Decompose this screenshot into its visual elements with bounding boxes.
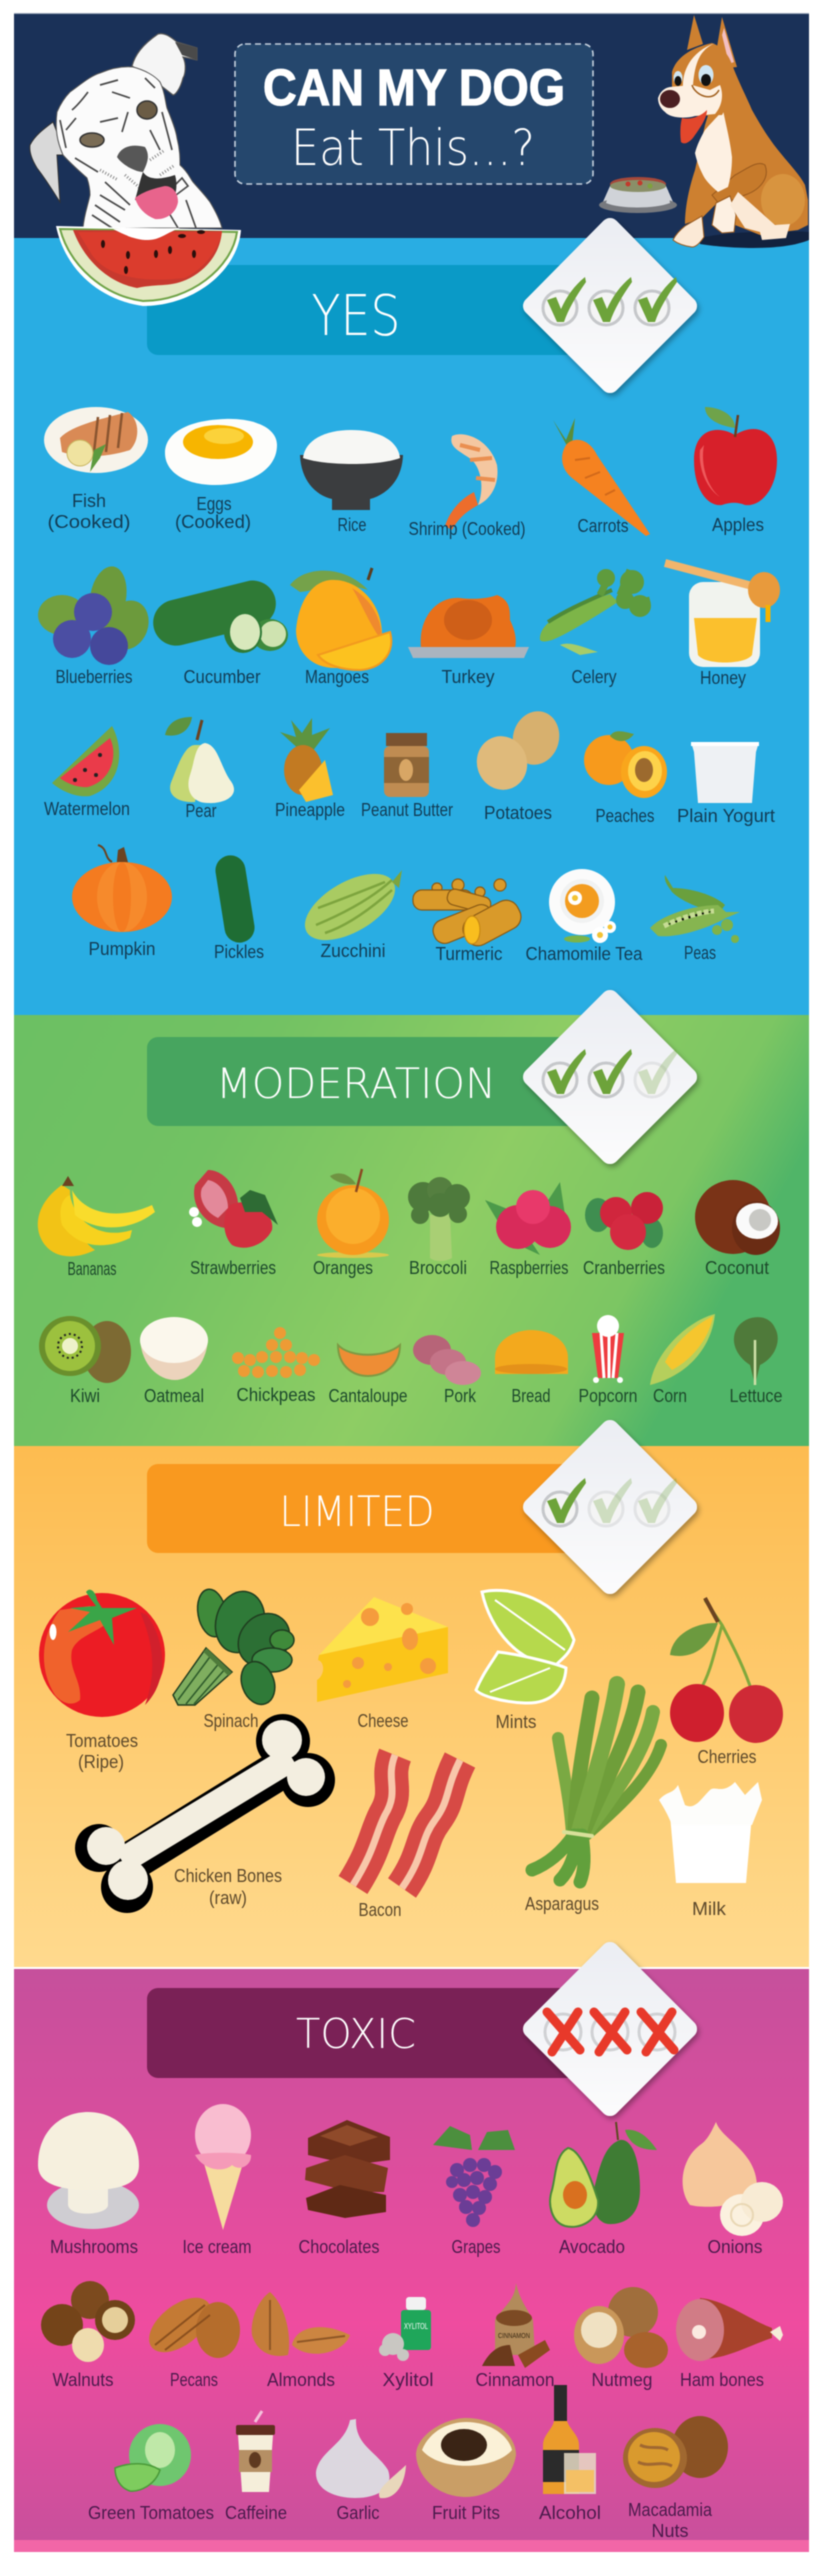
food: macadamia nuts xyxy=(623,2416,728,2541)
food: coconut: Coconut xyxy=(705,1258,769,1278)
food: pork xyxy=(413,1335,481,1406)
heading bar: yes xyxy=(147,265,587,355)
heading bar: moderation xyxy=(147,1037,587,1126)
food: plain yogurt xyxy=(677,742,775,826)
food: peas xyxy=(650,875,740,963)
food: lettuce: Lettuce xyxy=(730,1386,782,1406)
food: celery: Celery xyxy=(572,667,616,687)
food: kiwi xyxy=(39,1316,131,1406)
food: avocado xyxy=(550,2122,657,2257)
food: pear xyxy=(165,717,234,821)
food: strawberries xyxy=(189,1170,278,1278)
food: chicken bones: Chicken Bones xyxy=(174,1866,282,1886)
food: grapes xyxy=(433,2126,515,2257)
panel: toxic xyxy=(14,1951,809,2552)
food: bananas xyxy=(38,1176,155,1279)
heading bar: limited xyxy=(147,1464,587,1553)
food: asparagus xyxy=(525,1684,661,1914)
food: apples: Apples xyxy=(712,515,764,535)
food: walnuts: Walnuts xyxy=(52,2370,114,2390)
food: pear: Pear xyxy=(186,801,216,821)
food: bacon xyxy=(353,1755,460,1920)
food: spinach xyxy=(173,1586,300,1731)
food: mushrooms xyxy=(38,2112,139,2257)
food: rice: Rice xyxy=(338,515,366,535)
header banner xyxy=(14,13,809,239)
food: honey xyxy=(665,563,780,688)
food: nutmeg: Nutmeg xyxy=(592,2370,652,2390)
panel: limited xyxy=(14,1429,809,1967)
food: pecans: Pecans xyxy=(170,2370,218,2390)
food: cranberries: Cranberries xyxy=(583,1258,665,1278)
food: garlic xyxy=(316,2419,406,2523)
food: bread: Bread xyxy=(512,1386,550,1406)
food: mints: Mints xyxy=(496,1712,536,1732)
food: bananas: Bananas xyxy=(68,1259,116,1279)
food: cinnamon: Cinnamon xyxy=(476,2370,554,2390)
food: macadamia nuts: Macadamia xyxy=(628,2500,713,2520)
food: fish: Fish xyxy=(72,491,106,511)
food: peas: Peas xyxy=(684,943,716,963)
food: almonds: Almonds xyxy=(267,2370,335,2390)
food: chamomile tea: Chamomile Tea xyxy=(526,944,643,964)
food: chicken bones: (raw) xyxy=(209,1888,247,1908)
food: celery xyxy=(540,569,651,687)
food: cinnamon: CINNAMON xyxy=(498,2333,530,2340)
food: caffeine xyxy=(225,2411,287,2523)
food: fruit pits: Fruit Pits xyxy=(432,2503,500,2523)
food: xylitol: XYLITOL xyxy=(404,2322,428,2331)
food: onions: Onions xyxy=(708,2237,762,2257)
food: turmeric xyxy=(413,879,526,964)
title line 1: CAN MY DOG xyxy=(263,59,565,116)
food: mangoes: Mangoes xyxy=(305,667,369,687)
food: shrimp: Shrimp (Cooked) xyxy=(408,519,526,539)
food: pineapple: Pineapple xyxy=(275,800,345,820)
food: chicken bones xyxy=(75,1714,335,1913)
food: xylitol: Xylitol xyxy=(382,2370,434,2390)
food: coconut xyxy=(695,1180,780,1278)
food: bread xyxy=(495,1330,568,1406)
food: raspberries xyxy=(485,1182,571,1278)
food: mints xyxy=(476,1590,574,1732)
rating diamond: two checks xyxy=(532,999,688,1155)
food: cantaloupe: Cantaloupe xyxy=(328,1386,408,1406)
food: caffeine: Caffeine xyxy=(225,2503,287,2523)
icon: white dog eating watermelon xyxy=(30,34,241,306)
food: turkey xyxy=(408,595,529,687)
panel: yes xyxy=(14,227,809,1016)
food: turkey: Turkey xyxy=(442,667,494,687)
food: green tomatoes: Green Tomatoes xyxy=(88,2503,214,2523)
rating diamond: three checks xyxy=(532,227,688,384)
food: ice cream: Ice cream xyxy=(182,2237,252,2257)
food: carrots: Carrots xyxy=(578,516,628,536)
food: peanut butter xyxy=(361,733,453,820)
food: raspberries: Raspberries xyxy=(490,1258,568,1278)
heading bar: toxic xyxy=(147,1988,587,2078)
food: pickles xyxy=(213,853,264,962)
food: apples xyxy=(694,407,777,535)
food: cantaloupe xyxy=(328,1345,408,1406)
food: corn xyxy=(650,1314,715,1406)
food: oatmeal xyxy=(140,1317,208,1406)
food: oranges xyxy=(313,1169,389,1278)
heading bar: moderation: MODERATION xyxy=(216,1059,496,1108)
food: spinach: Spinach xyxy=(204,1711,258,1731)
food: broccoli xyxy=(408,1177,470,1278)
food: plain yogurt: Plain Yogurt xyxy=(677,806,775,826)
food: fish: (Cooked) xyxy=(48,512,130,532)
food: cucumber xyxy=(148,576,288,687)
food: carrots xyxy=(553,418,650,536)
food: peaches xyxy=(584,731,667,826)
food: grapes: Grapes xyxy=(452,2237,500,2257)
food: blueberries xyxy=(38,563,155,687)
food: tomatoes xyxy=(39,1590,165,1772)
food: milk: Milk xyxy=(692,1899,727,1919)
panel: moderation xyxy=(14,999,809,1448)
food: eggs: (Cooked) xyxy=(175,512,251,532)
icon: food bowl xyxy=(599,177,677,213)
food: bacon: Bacon xyxy=(358,1900,402,1920)
food: cucumber: Cucumber xyxy=(184,667,261,687)
food: honey: Honey xyxy=(700,668,746,688)
food: pumpkin: Pumpkin xyxy=(88,939,156,959)
food: pecans xyxy=(139,2287,240,2390)
food: cherries xyxy=(670,1598,783,1767)
food: chocolates xyxy=(298,2120,390,2257)
food: cranberries xyxy=(583,1192,665,1278)
food: chickpeas xyxy=(232,1327,320,1405)
food: oatmeal: Oatmeal xyxy=(144,1386,204,1406)
food: fruit pits xyxy=(416,2418,516,2523)
food: ice cream xyxy=(182,2104,252,2257)
food: ham bones xyxy=(676,2298,783,2390)
food: strawberries: Strawberries xyxy=(190,1258,276,1278)
food: chocolates: Chocolates xyxy=(298,2237,380,2257)
food: zucchini xyxy=(294,860,406,961)
title line 2: Eat This...? xyxy=(291,119,535,177)
food: milk xyxy=(659,1782,762,1919)
food: cheese: Cheese xyxy=(358,1711,408,1731)
food: almonds xyxy=(252,2292,350,2390)
food: tomatoes: (Ripe) xyxy=(78,1752,124,1772)
food: chamomile tea xyxy=(526,869,643,964)
rating diamond: one check xyxy=(532,1429,688,1585)
icon: brown dog xyxy=(658,15,809,248)
food: pickles: Pickles xyxy=(214,942,264,962)
food: cinnamon xyxy=(476,2283,554,2390)
food: corn: Corn xyxy=(653,1386,687,1406)
food: eggs xyxy=(165,419,277,532)
food: garlic: Garlic xyxy=(336,2503,380,2523)
food: tomatoes: Tomatoes xyxy=(66,1731,138,1751)
food: lettuce xyxy=(730,1317,782,1406)
food: broccoli: Broccoli xyxy=(409,1258,467,1278)
food: popcorn: Popcorn xyxy=(578,1386,638,1406)
food: turmeric: Turmeric xyxy=(436,944,502,964)
food: pumpkin xyxy=(72,845,172,959)
food: eggs: Eggs xyxy=(196,494,232,514)
food: rice xyxy=(300,430,403,535)
food: onions xyxy=(683,2122,783,2257)
food: green tomatoes xyxy=(88,2424,214,2523)
food: chickpeas: Chickpeas xyxy=(236,1385,316,1405)
food: alcohol: Alcohol xyxy=(539,2503,601,2523)
food: shrimp xyxy=(408,434,526,539)
food: pork: Pork xyxy=(444,1386,477,1406)
heading bar: limited: LIMITED xyxy=(280,1487,434,1536)
food: alcohol xyxy=(539,2385,601,2523)
food: macadamia nuts: Nuts xyxy=(652,2521,688,2541)
title box xyxy=(235,44,593,184)
food: avocado: Avocado xyxy=(559,2237,625,2257)
food: cherries: Cherries xyxy=(698,1747,756,1767)
food: blueberries: Blueberries xyxy=(56,667,132,687)
food: pineapple xyxy=(275,718,345,820)
food: popcorn xyxy=(578,1315,638,1406)
food: kiwi: Kiwi xyxy=(70,1386,100,1406)
food: watermelon xyxy=(44,726,130,819)
food: walnuts xyxy=(41,2281,135,2390)
food: zucchini: Zucchini xyxy=(320,941,386,961)
watermelon slice xyxy=(56,226,241,306)
food: peanut butter: Peanut Butter xyxy=(361,800,453,820)
rating diamond: three crosses xyxy=(532,1951,688,2107)
food: asparagus: Asparagus xyxy=(525,1894,599,1914)
food: potatoes: Potatoes xyxy=(484,803,552,823)
food: nutmeg xyxy=(574,2287,668,2390)
food: mangoes xyxy=(290,568,391,687)
heading bar: toxic: TOXIC xyxy=(296,2010,416,2058)
food: fish xyxy=(44,407,148,532)
food: potatoes xyxy=(470,706,565,823)
food: watermelon: Watermelon xyxy=(44,799,130,819)
heading bar: yes: YES xyxy=(312,284,400,349)
food: ham bones: Ham bones xyxy=(680,2370,764,2390)
food: xylitol xyxy=(379,2297,434,2390)
food: cheese xyxy=(317,1597,448,1731)
food: peaches: Peaches xyxy=(596,806,654,826)
food: mushrooms: Mushrooms xyxy=(50,2237,138,2257)
food: oranges: Oranges xyxy=(313,1258,373,1278)
